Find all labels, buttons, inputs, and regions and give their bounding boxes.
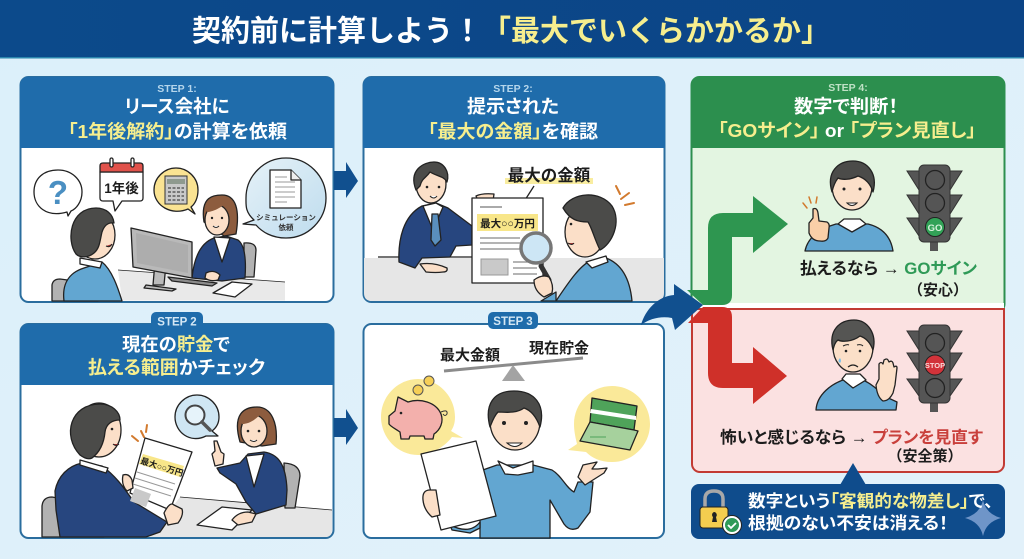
savings check heading: 払える範囲かチェック <box>88 357 265 378</box>
step tab <box>151 312 203 330</box>
icon: traffic light stop <box>907 325 962 412</box>
figure: man with thumbs up <box>803 161 893 251</box>
step tab <box>488 312 538 329</box>
icon: magnifier bubble <box>175 395 219 439</box>
icon: question bubble <box>34 170 82 216</box>
step 1 illustration: desk and chair <box>52 243 285 301</box>
step 1 heading: 「1年後解約」の計算を依頼 <box>68 121 287 142</box>
figure: customer from behind <box>64 208 122 301</box>
step 1 heading: リース会社に <box>124 96 230 117</box>
step 1 heading <box>68 83 287 142</box>
scale comparison: 現在貯金 <box>529 339 589 357</box>
panel: step 3 <box>364 312 664 538</box>
icon: document speech bubble: 依頼 <box>278 222 294 232</box>
icon: traffic light go <box>907 165 962 251</box>
label: maximum amount: 最大の金額 <box>508 165 591 185</box>
icon: document speech bubble <box>243 158 326 238</box>
step tab: STEP 3 <box>493 316 533 328</box>
callout text <box>748 491 993 533</box>
label: review the plan: 怖いと感じるなら → プランを見直す <box>720 427 983 447</box>
icon: sparkle <box>965 500 1001 536</box>
icon: calendar one year later: 1年後 <box>104 180 139 196</box>
arrow: green go path <box>687 196 788 305</box>
icon: calculator bubble <box>154 168 198 214</box>
red lower panel <box>692 309 1004 472</box>
document with highlighted amount <box>472 198 543 283</box>
callout text: 数字という「客観的な物差し」 で、 <box>748 491 993 511</box>
panel: step 4 decision <box>691 77 1005 472</box>
icon: bank passbook bubble <box>568 386 650 462</box>
figure: customer reading document <box>55 403 167 537</box>
icon: question bubble: ? <box>48 174 68 211</box>
figure: staff woman pointing <box>212 407 287 525</box>
label: review the plan: （安全策） <box>887 447 963 465</box>
savings check heading <box>88 334 265 378</box>
label: maximum amount <box>505 165 593 211</box>
panel: step 1 <box>20 77 334 302</box>
icon: calendar one year later <box>100 158 143 211</box>
icon: padlock with check <box>700 491 742 534</box>
icon: document speech bubble: シミュレーション <box>256 213 316 222</box>
callout text: 根拠のない不安は消える！ <box>748 514 948 533</box>
step 4 heading <box>718 82 976 141</box>
step 2 table <box>364 258 664 301</box>
step 4 heading: STEP 4: <box>828 82 868 94</box>
callout: objective measure <box>691 463 1005 539</box>
step 4 heading: 「GOサイン」 or 「プラン見直し」 <box>718 120 976 141</box>
title bar <box>0 0 1024 58</box>
panel: step 2 savings check <box>20 312 334 538</box>
figure: staff woman with monitor <box>131 195 245 291</box>
document with highlighted amount: 最大○○万円 <box>480 217 535 230</box>
table and chairs <box>42 463 332 537</box>
figure: customer with magnifier <box>521 186 634 301</box>
scale comparison: 最大金額 <box>440 346 500 364</box>
step tab: STEP 2 <box>157 316 197 328</box>
figure: man holding paper <box>421 391 607 538</box>
arrow: blue curved arrow into decision <box>641 284 703 330</box>
icon: traffic light go: GO <box>928 223 942 234</box>
scale comparison <box>440 339 589 381</box>
step 2 heading <box>428 83 598 142</box>
white divider <box>692 303 1004 310</box>
arrow: step 2 to step 3 <box>334 409 358 445</box>
step 1 heading: STEP 1: <box>157 83 197 95</box>
step 2 heading: 「最大の金額」を確認 <box>428 121 598 142</box>
savings check heading: 現在の貯金で <box>122 334 230 355</box>
figure: advisor in suit <box>378 162 494 272</box>
label: review the plan <box>720 427 983 465</box>
label: go sign <box>800 259 977 299</box>
document held by customer <box>122 438 192 525</box>
figure: worried man with raised hand <box>816 320 897 410</box>
step 4 heading: 数字で判断！ <box>794 96 898 117</box>
step 2 heading: STEP 2: <box>493 83 533 95</box>
document held by customer: 最大○○万円 <box>139 456 185 478</box>
label: go sign: （安心） <box>908 281 968 299</box>
arrow: step 1 to step 2 <box>334 162 358 198</box>
panel: step 2 <box>363 77 665 302</box>
step 2 heading: 提示された <box>467 96 559 117</box>
arrow: red review path <box>688 307 787 404</box>
label: go sign: 払えるなら → GOサイン <box>800 259 977 278</box>
icon: piggy bank bubble <box>381 376 463 455</box>
icon: traffic light stop: STOP <box>925 361 945 370</box>
title: 契約前に計算しよう！「最大でいくらかかるか」 <box>192 15 830 48</box>
